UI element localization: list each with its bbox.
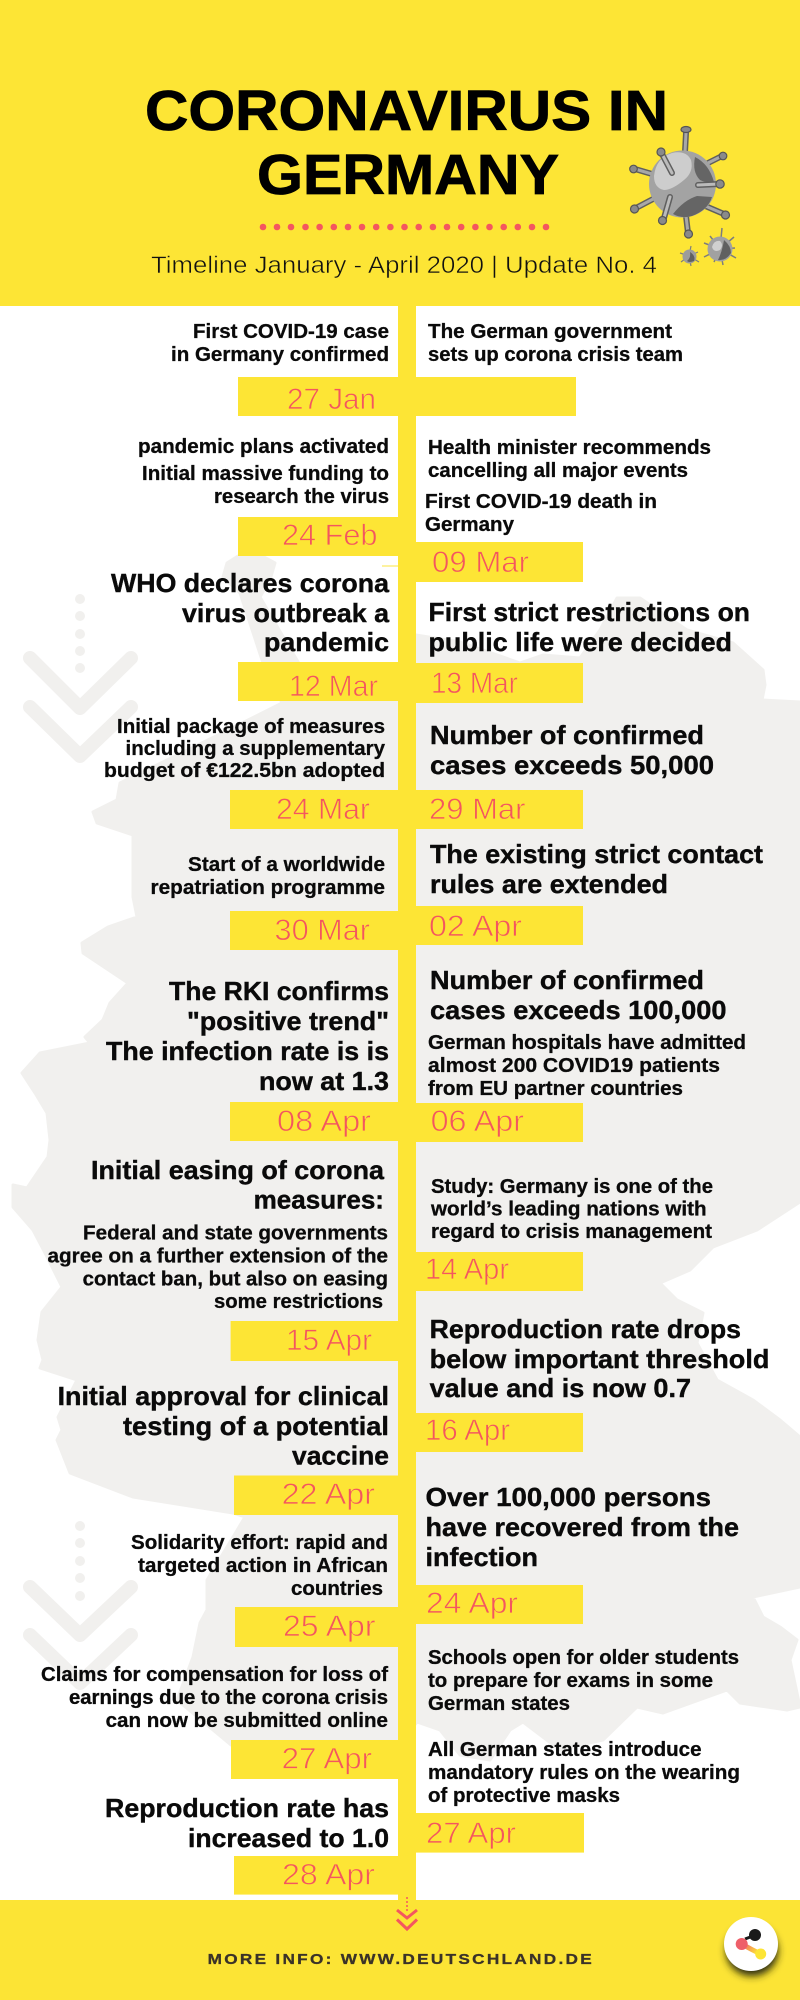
- date bar: 24 Mar: 24 Mar: [276, 793, 370, 826]
- event: hospitals admit EU patients: [428, 1032, 746, 1100]
- date bar: 13 Mar: 13 Mar: [431, 667, 518, 700]
- event: RKI positive trend: The RKI confirms: [169, 976, 389, 1006]
- event: contact rules extended: The existing strict contact: [430, 839, 763, 869]
- event: pandemic plans: Initial massive funding to: [142, 463, 389, 485]
- icon: small virus: [680, 246, 699, 266]
- subtitle: Timeline January - April 2020 | Update No. 4: [151, 252, 657, 279]
- event: mandatory masks: mandatory rules on the wearing: [428, 1762, 740, 1784]
- event: schools open: to prepare for exams in some: [428, 1670, 713, 1692]
- date bar: 16 Apr: [416, 1413, 583, 1452]
- date bar: 06 Apr: [416, 1103, 583, 1142]
- event: hospitals admit EU patients: from EU partner countries: [428, 1078, 683, 1100]
- event: initial package: budget of €122.5bn adopted: [104, 760, 385, 782]
- event: initial easing: Federal and state governments: [83, 1223, 388, 1245]
- event: hospitals admit EU patients: German hospitals have admitted: [428, 1032, 746, 1054]
- event: 100,000 cases: cases exceeds 100,000: [430, 995, 726, 1025]
- date bar: 08 Apr: 08 Apr: [277, 1105, 371, 1138]
- event: RKI positive trend: now at 1.3: [259, 1066, 389, 1096]
- event: initial package: Initial package of measures: [117, 716, 385, 738]
- date bar: 27 Apr right: 27 Apr: [426, 1817, 516, 1850]
- date bar: 22 Apr: 22 Apr: [282, 1478, 375, 1511]
- event: study on crisis management: regard to crisis management: [431, 1221, 712, 1243]
- date bar: 27 Jan: [238, 377, 576, 416]
- date bar: 30 Mar: 30 Mar: [274, 914, 370, 947]
- event: reproduction rate 1.0: [105, 1793, 389, 1853]
- event: crisis team: sets up corona crisis team: [428, 344, 683, 366]
- date bar: 22 Apr: [234, 1476, 398, 1515]
- event: repatriation programme: [150, 854, 385, 899]
- event: reproduction rate 0.7: Reproduction rate drops: [430, 1314, 741, 1344]
- event: reproduction rate 0.7: value and is now 0.7: [430, 1373, 691, 1403]
- event: 50,000 cases: Number of confirmed: [430, 720, 704, 750]
- event: strict restrictions: [428, 597, 750, 657]
- date bar: 02 Apr: 02 Apr: [429, 910, 522, 943]
- event: initial easing: contact ban, but also on easing: [83, 1269, 388, 1291]
- date bar: 27 Apr left: 27 Apr: [282, 1742, 372, 1776]
- event: 100,000 cases: Number of confirmed: [430, 965, 704, 995]
- event: mandatory masks: All German states introduce: [428, 1739, 702, 1761]
- event: schools open: Schools open for older students: [428, 1647, 739, 1669]
- event: first death: [425, 491, 657, 536]
- event: reproduction rate 0.7: below important threshold: [430, 1344, 769, 1374]
- more info text: MORE INFO: WWW.DEUTSCHLAND.DE: [208, 1951, 594, 1968]
- event: schools open: [428, 1647, 739, 1715]
- event: initial package: [104, 716, 386, 782]
- date bar: 25 Apr: [235, 1607, 398, 1647]
- decorative arrow upper: [30, 594, 131, 756]
- event: RKI positive trend: The infection rate is is: [106, 1036, 389, 1066]
- event: initial easing: [48, 1155, 388, 1313]
- header panel: [0, 0, 800, 306]
- event: health minister: [428, 437, 711, 482]
- event: contact rules extended: [430, 839, 763, 899]
- event: solidarity effort: countries: [291, 1578, 383, 1600]
- event: first death: Germany: [425, 514, 515, 536]
- date bar: 27 Apr right: [416, 1813, 584, 1853]
- date bar: 28 Apr: [234, 1856, 398, 1895]
- event: health minister: cancelling all major events: [428, 460, 688, 482]
- event: 100,000 recovered: infection: [426, 1542, 538, 1572]
- event: first case in Germany: First COVID-19 case: [193, 321, 389, 343]
- event: 100,000 recovered: Over 100,000 persons: [426, 1482, 711, 1512]
- event: strict restrictions: public life were decided: [428, 627, 732, 657]
- event: initial easing: some restrictions: [214, 1291, 383, 1313]
- event: compensation claims: earnings due to the corona crisis: [69, 1687, 388, 1709]
- date bar: 24 Mar: [230, 790, 398, 829]
- event: 100,000 recovered: [426, 1482, 739, 1572]
- dotted divider: [260, 224, 549, 230]
- event: repatriation programme: Start of a worldwide: [188, 854, 385, 876]
- date bar: 09 Mar: [416, 542, 583, 582]
- icon: medium virus: [704, 228, 736, 265]
- event: vaccine testing: testing of a potential: [123, 1411, 389, 1441]
- event: solidarity effort: Solidarity effort: rapid and: [131, 1532, 388, 1554]
- date bar: 25 Apr: 25 Apr: [283, 1610, 376, 1643]
- event: 50,000 cases: [430, 720, 714, 780]
- date bar: 06 Apr: 06 Apr: [431, 1105, 524, 1138]
- title: CORONAVIRUS IN: [145, 79, 668, 143]
- event: initial easing: Initial easing of corona: [91, 1155, 385, 1185]
- background map of Germany: [13, 556, 800, 1760]
- event: reproduction rate 0.7: [430, 1314, 769, 1403]
- event: RKI positive trend: [106, 976, 389, 1096]
- event: 100,000 cases: [430, 965, 726, 1025]
- event: mandatory masks: of protective masks: [428, 1785, 620, 1807]
- date bar: 09 Mar: 09 Mar: [432, 546, 529, 579]
- event: strict restrictions: First strict restrictions on: [428, 597, 750, 627]
- event: WHO pandemic: pandemic: [264, 627, 389, 657]
- event: vaccine testing: Initial approval for clinical: [58, 1381, 389, 1411]
- event: reproduction rate 1.0: Reproduction rate has: [105, 1793, 389, 1823]
- event: vaccine testing: vaccine: [292, 1440, 389, 1470]
- date bar: 27 Apr left: [231, 1740, 398, 1779]
- event: 50,000 cases: cases exceeds 50,000: [430, 750, 714, 780]
- event: hospitals admit EU patients: almost 200 COVID19 patients: [428, 1055, 720, 1077]
- date bar: 12 Mar: 12 Mar: [289, 670, 378, 703]
- event: WHO pandemic: virus outbreak a: [182, 598, 390, 628]
- event: solidarity effort: targeted action in African: [138, 1555, 388, 1577]
- date bar: 14 Apr: 14 Apr: [425, 1253, 509, 1286]
- event: initial easing: agree on a further extension of the: [48, 1246, 388, 1268]
- event: compensation claims: Claims for compensation for loss of: [41, 1664, 388, 1686]
- date bar: 24 Apr: 24 Apr: [426, 1587, 518, 1620]
- event: pandemic plans: research the virus: [214, 486, 389, 508]
- date bar: 24 Feb: 24 Feb: [282, 519, 378, 552]
- event: WHO pandemic: WHO declares corona: [111, 568, 390, 598]
- date bar: 13 Mar: [416, 663, 583, 703]
- icon: large virus: [630, 126, 730, 238]
- date bar: 28 Apr: 28 Apr: [282, 1859, 375, 1892]
- event: health minister: Health minister recommends: [428, 437, 711, 459]
- event: crisis team: The German government: [428, 321, 672, 343]
- event: study on crisis management: Study: Germany is one of the: [431, 1176, 713, 1198]
- date bar: 15 Apr: 15 Apr: [286, 1324, 372, 1357]
- date bar: 29 Mar: [416, 790, 583, 829]
- event: vaccine testing: [58, 1381, 389, 1470]
- title: [145, 79, 668, 207]
- icon: deutschland.de logo: [724, 1917, 778, 1976]
- event: solidarity effort: [131, 1532, 388, 1600]
- event: schools open: German states: [428, 1693, 570, 1715]
- event: WHO pandemic: [111, 568, 390, 657]
- event: contact rules extended: rules are extended: [430, 869, 668, 899]
- event: compensation claims: can now be submitted online: [106, 1710, 388, 1732]
- timeline spine: [398, 306, 416, 1900]
- footer panel: [0, 1897, 800, 2000]
- date bar: 12 Mar: [238, 662, 398, 703]
- event: first case in Germany: in Germany confirmed: [171, 344, 389, 366]
- event: study on crisis management: world’s leading nations with: [430, 1198, 707, 1220]
- event: first death: First COVID-19 death in: [425, 491, 657, 513]
- arrow: down chevrons: [397, 1897, 417, 1929]
- date bar: 08 Apr: [230, 1102, 398, 1141]
- title: GERMANY: [257, 143, 559, 207]
- event: first case in Germany: [171, 321, 389, 366]
- decorative arrow lower: [30, 1521, 131, 1683]
- event: pandemic plans: [138, 436, 389, 508]
- event: compensation claims: [41, 1664, 388, 1732]
- event: repatriation programme: repatriation programme: [150, 877, 385, 899]
- event: mandatory masks: [428, 1739, 740, 1807]
- event: pandemic plans: pandemic plans activated: [138, 436, 389, 458]
- event: reproduction rate 1.0: increased to 1.0: [188, 1823, 389, 1853]
- date bar: 29 Mar: 29 Mar: [429, 793, 526, 826]
- event: 100,000 recovered: have recovered from the: [426, 1512, 739, 1542]
- event: study on crisis management: [430, 1176, 713, 1243]
- date bar: 24 Feb: [238, 517, 398, 556]
- event: initial package: including a supplementary: [126, 738, 386, 760]
- event: initial easing: measures:: [254, 1185, 384, 1215]
- date bar: 16 Apr: 16 Apr: [425, 1414, 510, 1447]
- date bar: 27 Jan: 27 Jan: [287, 383, 376, 416]
- date bar: 14 Apr: [416, 1252, 583, 1291]
- event: crisis team: [428, 321, 683, 366]
- date bar: 02 Apr: [416, 906, 583, 945]
- small tick mark: [382, 565, 398, 567]
- date bar: 24 Apr: [416, 1585, 583, 1624]
- date bar: 30 Mar: [230, 911, 398, 950]
- event: RKI positive trend: "positive trend": [187, 1006, 389, 1036]
- date bar: 15 Apr: [231, 1321, 398, 1361]
